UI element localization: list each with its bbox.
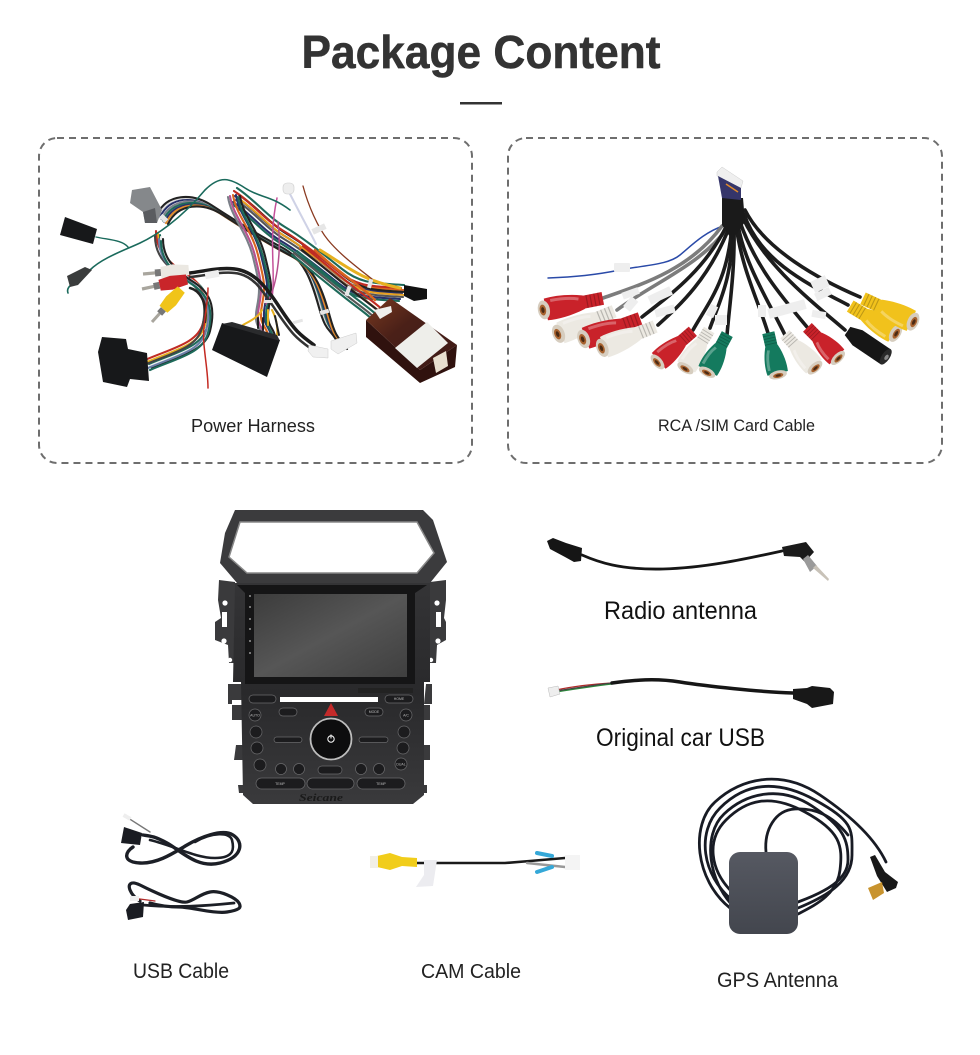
thin white wire [288,190,316,244]
hazard button [324,703,338,716]
lower body [233,583,430,804]
black left connector [60,217,97,244]
connector: white 2 [593,316,659,361]
label: Radio antenna [604,597,757,625]
connector: yellow 1 [844,296,906,346]
button labels [250,697,409,786]
original car usb cable [548,680,834,752]
connector: white 4 [777,327,826,378]
mounting ears [215,580,446,793]
connector: yellow 2 [858,288,923,334]
black harness connector left [98,337,149,387]
usb 1 wires and plug [125,816,150,832]
status strip [358,688,413,693]
caption: Power Harness [191,416,315,436]
connector: red 2 [574,308,644,352]
usb cable 1 [121,813,240,864]
label tags [614,263,832,325]
caption: RCA /SIM Card Cable [658,416,815,435]
cam cable [370,853,580,887]
white connector [565,855,580,870]
screen [254,594,407,677]
usb 1 plug [121,827,142,845]
connector: red 1 [536,287,605,322]
connector: white 1 [549,301,618,347]
black cables [642,210,860,335]
brown wire [303,186,372,279]
top frame [220,510,447,583]
usb small plug [548,686,560,697]
screen surround [237,585,427,684]
button labels: HOME [394,697,405,701]
title: Package Content [302,26,660,78]
red rca plug [141,273,188,296]
button labels: TEMP [275,782,286,786]
side icons [249,595,251,654]
button labels: A/C [403,714,409,718]
can bus module [366,298,457,383]
control pills [249,695,413,789]
gps module [729,852,798,934]
connector: white 3 [674,324,718,378]
button labels: MODE [369,710,380,714]
button labels: DUAL [396,762,406,766]
antenna right plug [782,542,814,562]
usb 2 wires [132,898,155,901]
green wire to black connector [96,237,128,247]
blue wire [548,226,723,278]
panel: power harness [39,138,472,463]
sma plug [870,855,898,892]
cam cable label: CAM Cable [421,961,521,983]
black harness connector large [212,323,280,377]
label: Original car USB [596,724,765,752]
button labels: TEMP [376,782,387,786]
usb cable 2 [126,883,240,920]
usb cable label: USB Cable [133,960,229,983]
round buttons [249,709,412,774]
radio antenna cable [547,538,829,625]
white plug [283,183,294,194]
button labels: AUTO [250,714,260,718]
multi pin connector [717,167,743,200]
rca yellow plug [377,853,417,870]
small grey plug [67,267,92,287]
connector: red 4 [800,320,849,369]
head unit radio panel [215,510,447,804]
red wire [204,288,208,388]
panel: rca sim card cable [508,138,942,463]
connector: green 2 [758,330,790,381]
connector: red 3 [647,323,700,373]
usb 2 plug [126,902,144,920]
green antenna wire [68,180,290,293]
black cable trunk [722,198,745,240]
white cable ties [159,214,373,324]
label tag [416,860,437,887]
yellow rca plug [147,285,186,326]
usb right connector [793,686,834,708]
title underline [460,102,502,104]
wire bundles [144,188,406,370]
black rca cable [190,268,314,345]
tag [205,270,220,279]
white rca plug [142,263,189,281]
grey cables [603,226,726,310]
black audio jack [843,324,894,366]
antenna left connector [547,538,582,562]
label: GPS Antenna [717,969,838,992]
grey connector [130,187,162,223]
gps antenna [699,779,898,992]
connector: green 1 [695,329,737,381]
frame window [229,522,434,573]
coiled cable [699,779,886,914]
mounting holes [221,600,441,662]
dial [310,718,352,760]
brand: Seicane [299,792,343,804]
usb wires [556,683,612,692]
black 6 pin connector [404,285,427,301]
blue terminals [537,853,552,872]
white pcb connectors [308,345,328,358]
white strip [280,697,378,702]
